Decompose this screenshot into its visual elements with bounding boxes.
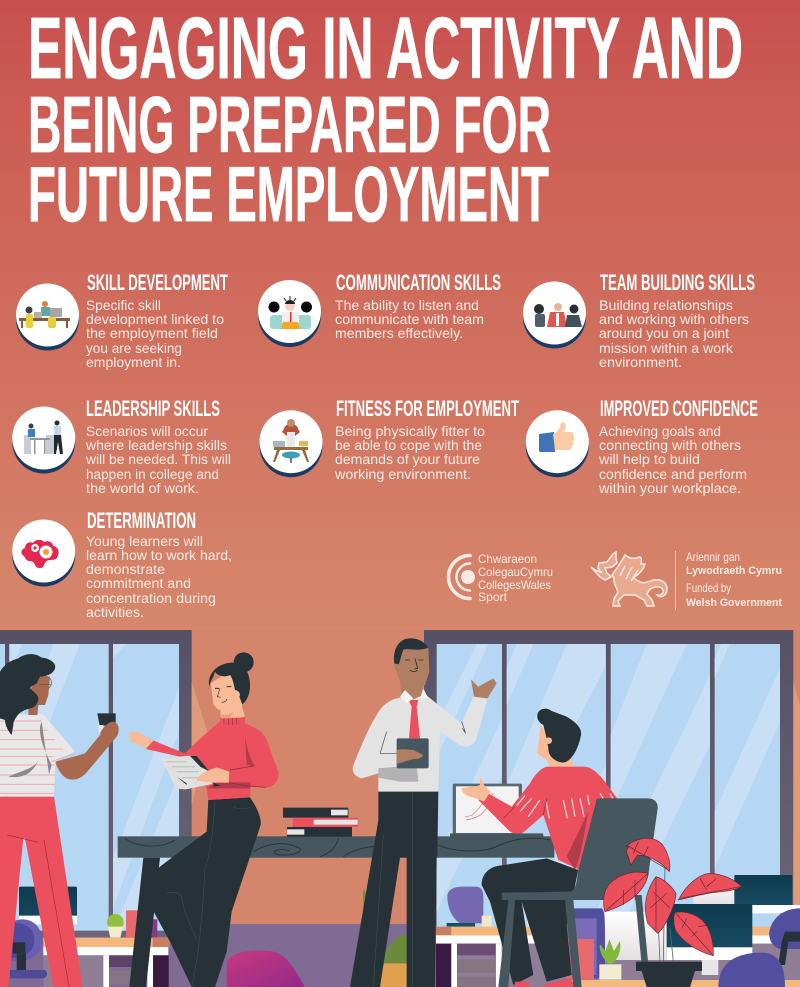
books on table <box>283 808 358 837</box>
description: Achieving goals and <box>599 423 721 439</box>
illustration: office scene <box>0 630 800 987</box>
logo text: funding statement: Funded by <box>686 581 731 595</box>
title <box>28 0 743 238</box>
plant: red leaves <box>604 838 742 987</box>
description: will be needed. This will <box>85 451 231 467</box>
description: communicate with team <box>335 311 484 327</box>
panel: leadership skills <box>12 396 231 496</box>
description: Young learners will <box>86 533 203 549</box>
chair <box>498 798 658 987</box>
icon: team meeting <box>16 284 79 350</box>
description: happen in college and <box>86 466 219 482</box>
heading: FITNESS FOR EMPLOYMENT <box>336 396 519 421</box>
description: development linked to <box>86 311 224 327</box>
plant behind table <box>363 888 410 987</box>
logo text: funding statement: Welsh Government <box>686 597 782 609</box>
description: working environment. <box>334 466 471 482</box>
description: Being physically fitter to <box>335 423 485 439</box>
description: Scenarios will occur <box>86 423 208 439</box>
icon: team <box>523 282 586 348</box>
logo: Colleges Wales Sport <box>448 552 553 604</box>
desk: left <box>43 938 170 987</box>
description: concentration during <box>86 590 216 606</box>
icon: fitness <box>260 410 322 477</box>
icon: thumbs up <box>526 410 589 477</box>
person: woman with coffee <box>0 654 119 987</box>
logo: Colleges Wales Sport: Sport <box>478 590 508 604</box>
window: right <box>424 630 800 931</box>
floor <box>0 924 800 987</box>
heading: SKILL DEVELOPMENT <box>87 270 228 295</box>
logo text: funding statement: Lywodraeth Cymru <box>686 565 782 577</box>
panel: determination <box>12 508 232 620</box>
description: employment in. <box>86 354 181 370</box>
icon: leadership <box>12 406 75 474</box>
logo: Colleges Wales Sport: Chwaraeon <box>478 552 537 566</box>
description: and working with others <box>599 311 749 327</box>
description <box>335 297 484 341</box>
logo text: funding statement: Ariennir gan <box>686 550 740 564</box>
laptop <box>450 784 543 837</box>
panel: fitness for employment <box>260 396 519 482</box>
person: woman with clipboard <box>128 652 278 987</box>
description: connecting with others <box>599 437 741 453</box>
panel: skill development <box>16 270 228 370</box>
divider <box>675 551 676 610</box>
logo: Colleges Wales Sport: CollegesWales <box>478 578 551 592</box>
back right desks <box>436 875 800 987</box>
description: the world of work. <box>86 480 199 496</box>
table <box>118 836 554 987</box>
description: around you on a joint <box>599 325 729 341</box>
description: Specific skill <box>86 297 161 313</box>
logo: Colleges Wales Sport: ColegauCymru <box>478 565 553 579</box>
description: activities. <box>86 604 144 620</box>
description <box>86 533 232 620</box>
description: members effectively. <box>335 325 463 341</box>
window: left <box>0 630 208 937</box>
description: Building relationships <box>599 297 733 313</box>
description <box>85 423 231 496</box>
books and plant on left desk <box>107 910 157 938</box>
icon: brain with gears <box>12 520 75 586</box>
logo: Welsh Government dragon <box>591 552 667 606</box>
description: environment. <box>599 354 682 370</box>
heading: LEADERSHIP SKILLS <box>86 396 220 421</box>
description: will help to build <box>598 451 700 467</box>
description: be able to cope with the <box>335 437 482 453</box>
description: The ability to listen and <box>335 297 479 313</box>
description: demonstrate <box>86 561 165 577</box>
description: confidence and perform <box>599 466 747 482</box>
chair: back left <box>9 919 47 978</box>
heading: COMMUNICATION SKILLS <box>336 270 501 295</box>
person: man in shirt and tie <box>350 638 497 987</box>
heading: DETERMINATION <box>87 508 196 533</box>
description <box>599 297 749 370</box>
description: learn how to work hard, <box>86 547 232 563</box>
gradient panel <box>0 0 800 630</box>
icon: communication <box>258 280 321 347</box>
description <box>86 297 224 370</box>
description <box>598 423 747 496</box>
panel: improved confidence <box>526 396 758 496</box>
pink armchair <box>227 950 305 987</box>
monitor: back left <box>19 887 77 924</box>
description: mission within a work <box>599 340 734 356</box>
panel: communication skills <box>258 270 501 347</box>
person: seated man in red sweater <box>462 709 618 987</box>
description: you are seeking <box>86 340 182 356</box>
description: where leadership skills <box>85 437 227 453</box>
description <box>334 423 485 482</box>
description: demands of your future <box>335 451 480 467</box>
panel: team building skills <box>523 270 755 370</box>
description: commitment and <box>86 575 191 591</box>
description: the employment field <box>86 325 218 341</box>
logo text: funding statement <box>686 550 782 609</box>
description: within your workplace. <box>598 480 741 496</box>
